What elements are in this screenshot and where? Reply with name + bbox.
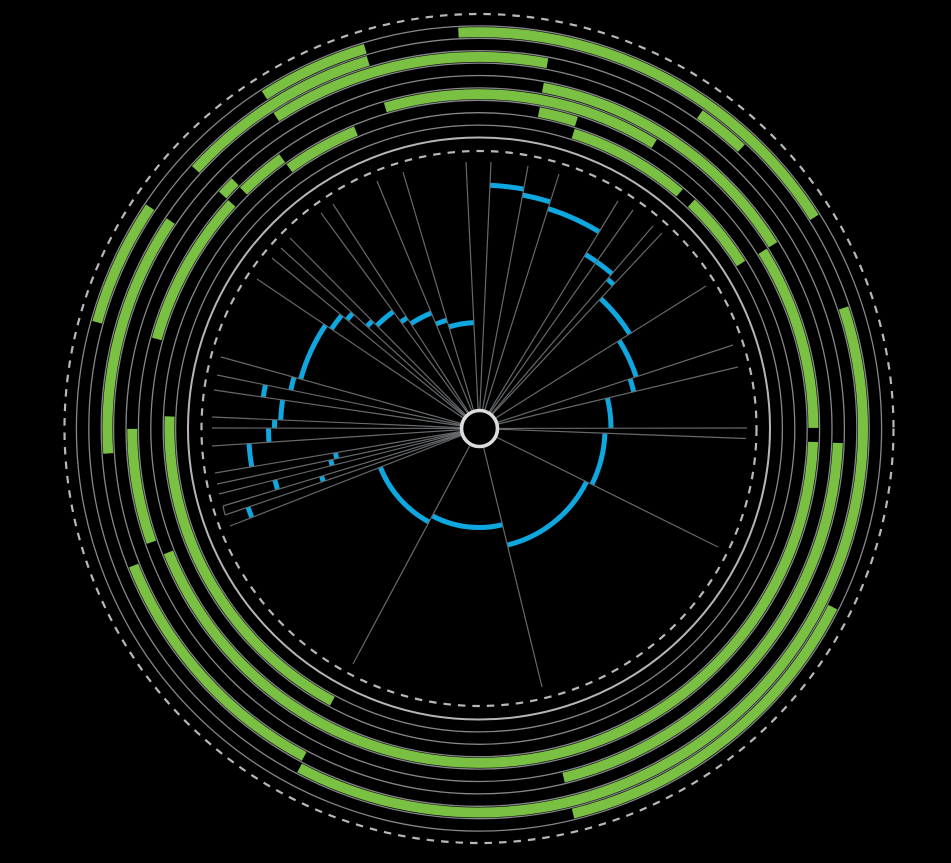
bright inner ring (188, 138, 770, 720)
green arcs: track 7 (95, 44, 863, 812)
radial spokes (212, 162, 747, 687)
inner dashed ring (202, 151, 756, 706)
green arcs: track 3 (145, 94, 813, 763)
concentric track rings (76, 26, 882, 831)
center hub circle (462, 410, 498, 446)
green arcs: track 8 (83, 32, 875, 825)
green arcs: track 2 (157, 106, 801, 750)
blue radial step arcs (235, 184, 723, 672)
green arcs: track 4 (132, 82, 826, 775)
green arcs: track 5 (120, 69, 838, 788)
green arcs: track 1 (169, 119, 789, 738)
green arcs: track 6 (107, 57, 851, 800)
